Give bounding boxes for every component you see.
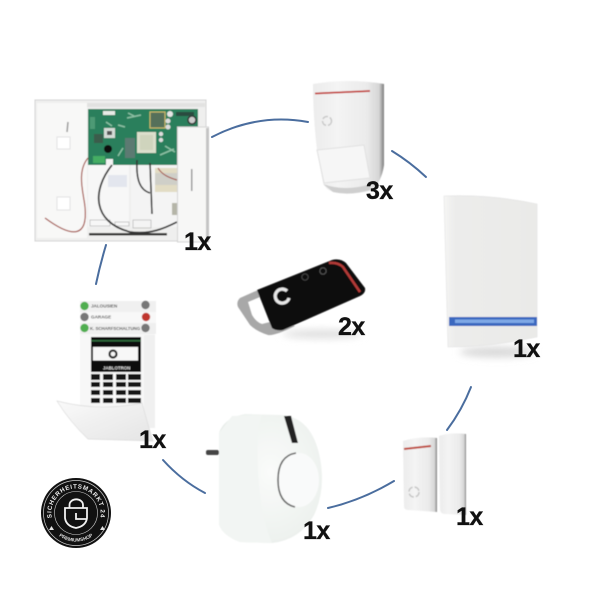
status rows [80, 301, 156, 334]
connecting arcs [96, 120, 471, 508]
brand badge: PREMIUMSHOP [59, 533, 92, 542]
keys [91, 374, 141, 403]
quantity labels: 3x [366, 177, 393, 205]
quantity labels: 1x [513, 335, 540, 363]
quantity labels: 1x [139, 426, 166, 454]
quantity labels [139, 177, 540, 545]
brand badge [41, 478, 111, 548]
door magnetic sensor [403, 433, 466, 515]
display [91, 337, 141, 372]
circuit board [88, 109, 198, 165]
quantity labels: 1x [184, 228, 211, 256]
black body [257, 259, 365, 330]
wall plug siren [206, 414, 322, 543]
transformer and terminals [89, 168, 178, 236]
outdoor siren [444, 196, 537, 357]
status rows: JALOUSIEN [91, 304, 118, 308]
key fob [237, 259, 365, 338]
brand badge: SICHERHEITSMARKT 24 [47, 484, 105, 518]
display: JABLOTRON [103, 366, 130, 370]
control panel [35, 100, 209, 242]
keypad [57, 301, 156, 441]
status rows: GARAGE [91, 314, 111, 320]
PIR motion detector [313, 81, 384, 194]
padlock icon [65, 499, 87, 528]
door contact on panel [178, 127, 209, 242]
metal ring [237, 290, 295, 335]
quantity labels: 1x [303, 517, 330, 545]
wires [45, 158, 177, 233]
fob logo [275, 289, 289, 303]
quantity labels: 2x [338, 313, 365, 341]
quantity labels: 1x [456, 503, 483, 531]
flip cover [57, 401, 153, 441]
status rows: K. SCHARFSCHALTUNG [90, 326, 141, 331]
